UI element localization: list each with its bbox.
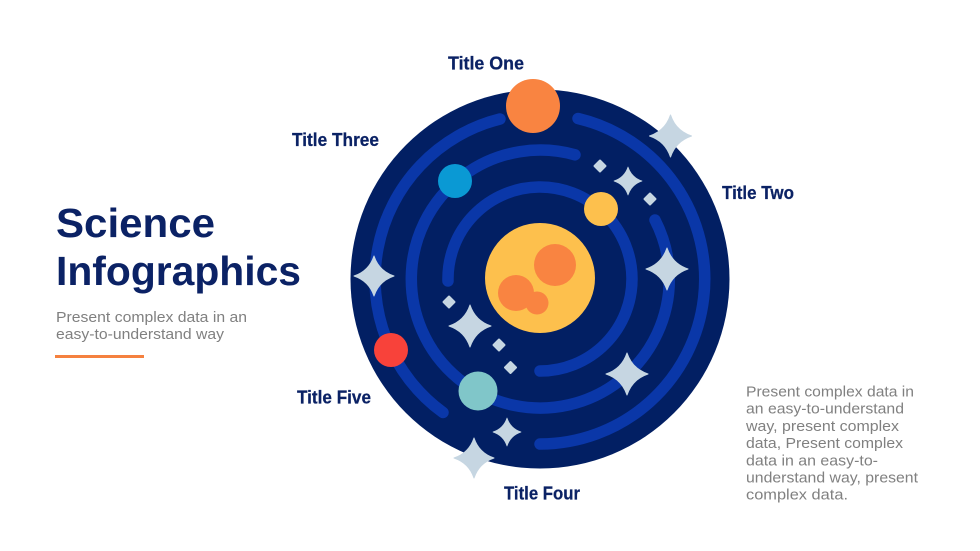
planet: blue (438, 164, 472, 198)
description text block: way, present complex (745, 418, 900, 435)
sun (485, 223, 595, 333)
solar system diagram (350, 79, 730, 478)
small diamonds (444, 160, 656, 373)
accent underline (55, 355, 144, 358)
label: Title One: Title One (448, 54, 524, 74)
space disc (350, 90, 730, 468)
stars (354, 115, 692, 478)
description text block: complex data. (746, 487, 848, 504)
label: Title Four: Title Four (504, 484, 580, 504)
label: Title Three: Title Three (292, 130, 379, 150)
description text block: Present complex data in (746, 384, 914, 400)
title: Infographics (56, 248, 301, 294)
title: Science (56, 200, 215, 246)
description text block: data in an easy-to- (746, 452, 878, 469)
subtitle (56, 309, 247, 343)
label: Title Five: Title Five (297, 388, 371, 408)
description text block: understand way, present (746, 470, 919, 486)
orbit rings (375, 118, 705, 444)
description text block: data, Present complex (746, 435, 904, 452)
description text block: an easy-to-understand (746, 401, 904, 418)
planet: teal (458, 372, 498, 410)
description text block (745, 384, 919, 504)
planet: yellow (584, 192, 618, 226)
title (56, 200, 301, 294)
planet: red (374, 333, 408, 367)
planet: orange (506, 79, 560, 133)
label: Title Two: Title Two (722, 183, 794, 203)
subtitle: easy-to-understand way (56, 326, 225, 343)
subtitle: Present complex data in an (56, 309, 247, 326)
